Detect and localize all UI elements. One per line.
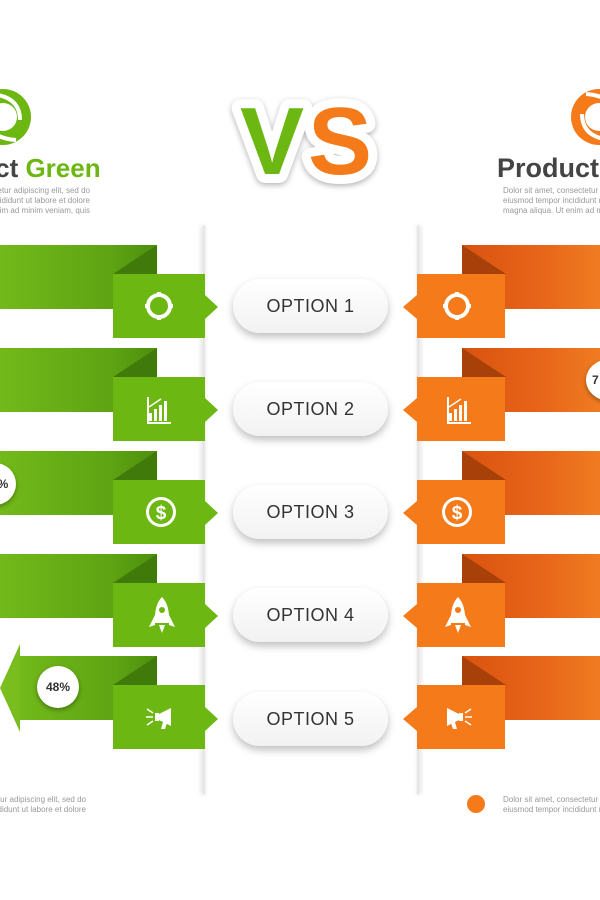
percentage: orange 2: [586, 359, 600, 401]
divider: right: [415, 225, 419, 795]
orange box 5 with megaphone icon: [417, 685, 505, 749]
percentage: green 3: [0, 463, 16, 505]
option pill 3: [233, 485, 388, 539]
green box 5 with megaphone icon: [113, 685, 205, 749]
row 2: [0, 348, 600, 441]
option pill 2: OPTION 2: [266, 399, 354, 419]
orange box 3 with dollar icon: [417, 480, 505, 544]
text block: green footer: [0, 795, 86, 814]
option pill 5: OPTION 5: [266, 709, 354, 729]
row 1: [0, 245, 600, 338]
option pill 3: OPTION 3: [266, 502, 354, 522]
option pill 4: OPTION 4: [266, 605, 354, 625]
percentage: 48%: 48%: [46, 680, 70, 694]
orange box 1 with gear icon: [417, 274, 505, 338]
title: VS: VS: [240, 88, 376, 192]
orange box 3 with dollar icon: $: [452, 503, 463, 524]
divider: left: [203, 225, 207, 795]
text block: orange footer: [503, 795, 600, 814]
percentage: orange 2: 7: [592, 373, 599, 387]
orange banner 1: [462, 245, 600, 309]
orange box 4 with rocket icon: [417, 583, 505, 647]
logo: green: [0, 89, 31, 145]
green box 3 with dollar icon: [113, 480, 205, 544]
option pill 5: [233, 692, 388, 746]
row 4: [0, 554, 600, 647]
row 5: [0, 644, 600, 749]
green box 4 with rocket icon: [113, 583, 205, 647]
option pill 1: OPTION 1: [266, 296, 354, 316]
row 3: [0, 451, 600, 544]
green arrow banner 5: [19, 656, 157, 720]
option pill 4: [233, 588, 388, 642]
green box 3 with dollar icon: $: [156, 503, 167, 524]
orange box 2 with chart icon: [417, 377, 505, 441]
option pill 2: [233, 382, 388, 436]
icon: orange dot: [467, 795, 485, 813]
green box 1 with gear icon: [113, 274, 205, 338]
option pill 1: [233, 279, 388, 333]
green banner 1: [0, 245, 157, 309]
green box 2 with chart icon: [113, 377, 205, 441]
text block: green description: [0, 186, 90, 215]
text block: orange description: [503, 186, 600, 215]
logo: orange: [571, 89, 600, 145]
percentage: 48%: [37, 666, 79, 708]
title: VS: VS: [240, 88, 376, 192]
